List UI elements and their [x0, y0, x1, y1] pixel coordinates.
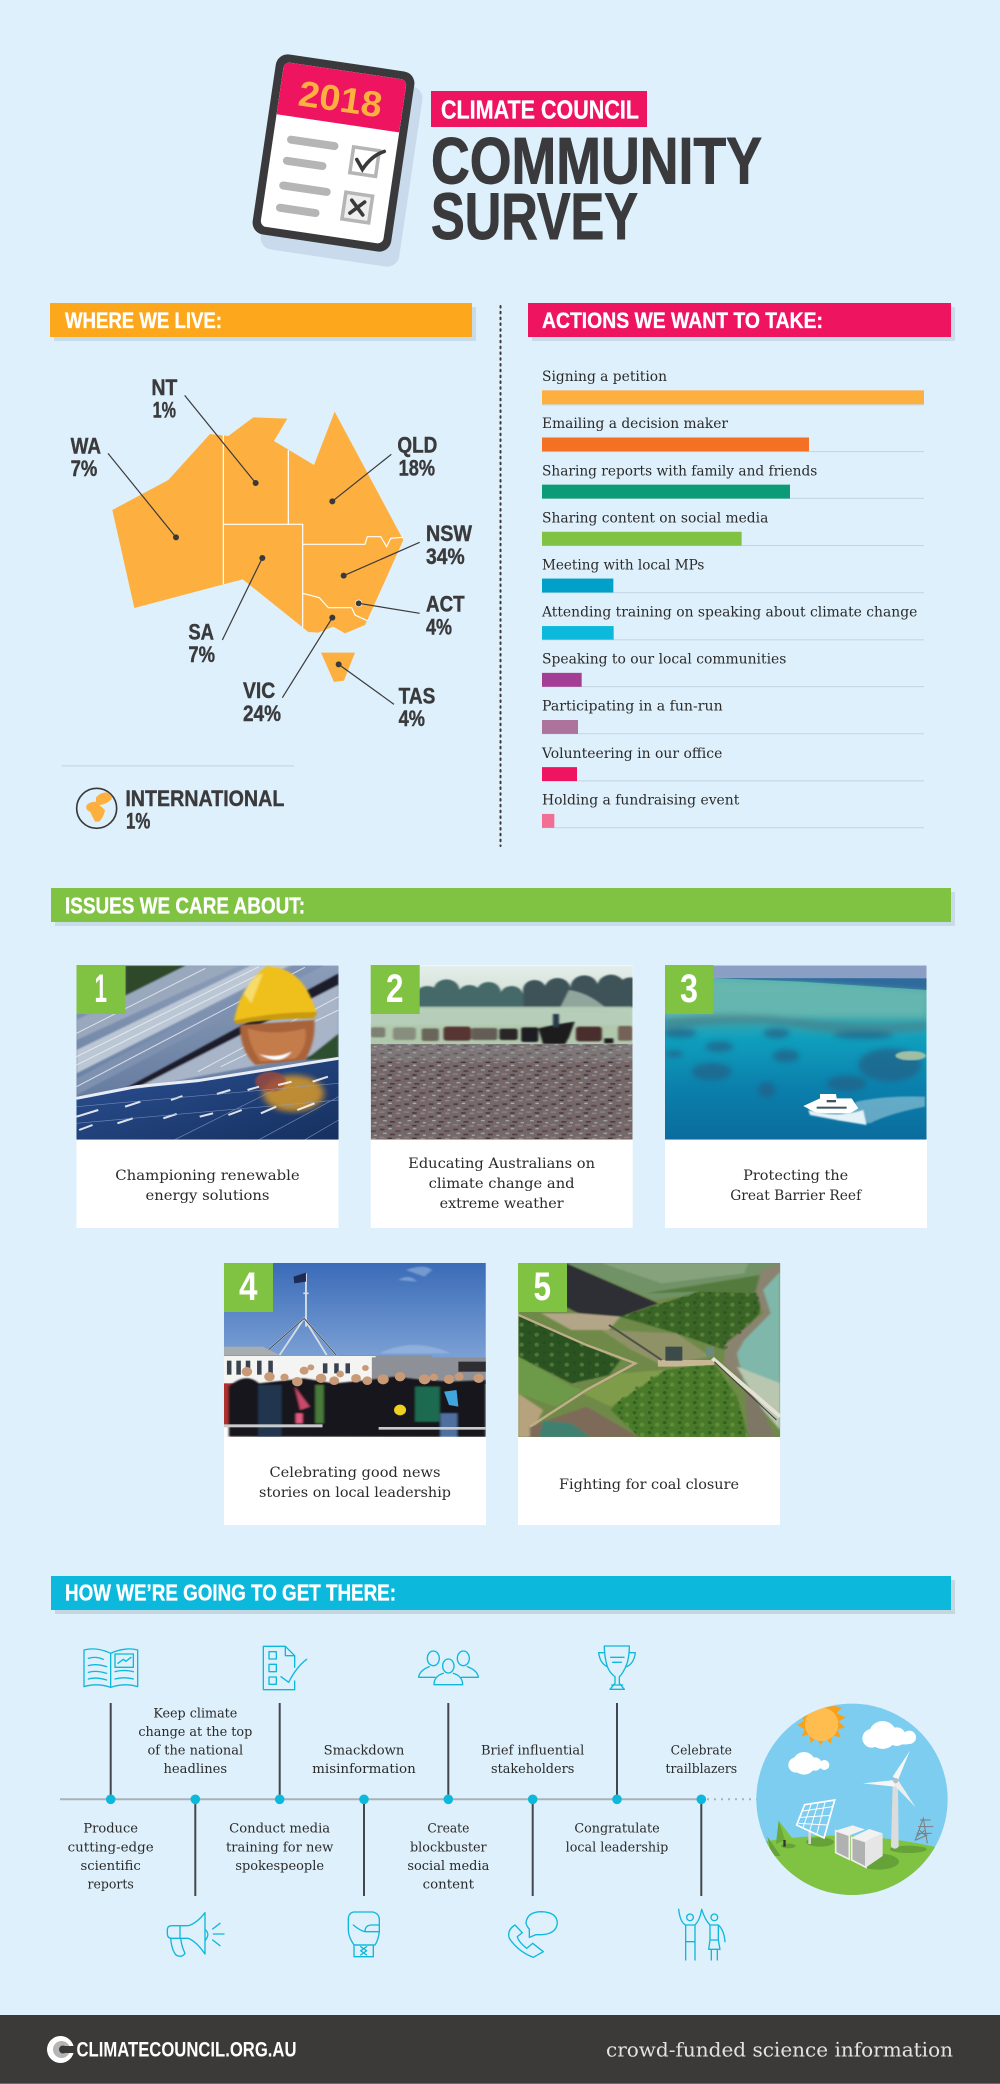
title — [431, 91, 762, 253]
international legend: 1% — [126, 809, 150, 834]
caption 2: climate change and — [429, 1176, 575, 1192]
bar chart: actions: Speaking to our local communities — [542, 652, 787, 668]
bar chart: actions: Emailing a decision maker — [542, 417, 729, 432]
caption 2: Educating Australians on — [408, 1156, 595, 1172]
map leader lines and labels: 24% — [243, 701, 281, 726]
map leader lines and labels: ACT — [426, 592, 465, 617]
panel: issue 5 — [518, 1263, 780, 1525]
caption 4: stories on local leadership — [259, 1485, 451, 1501]
icon: phone and speech bubble — [509, 1912, 557, 1957]
icon: trophy — [599, 1646, 635, 1689]
heading: actions we want to take: ACTIONS WE WANT TO TAKE: — [542, 308, 823, 333]
panel: issue 4 — [224, 1263, 486, 1525]
photo: solar panels worker — [76, 965, 339, 1140]
number badge 4 — [224, 1263, 273, 1312]
number badge 5: 5 — [534, 1265, 551, 1309]
international legend — [76, 788, 284, 830]
map leader lines and labels: QLD — [397, 433, 437, 458]
photo: drought cattle — [371, 965, 642, 1140]
pylon — [915, 1818, 933, 1843]
icon: checklist — [263, 1646, 307, 1690]
caption 3 — [730, 1168, 863, 1204]
icon: survey tablet 2018: 2018 — [296, 73, 385, 125]
panel: issue 2 — [371, 965, 642, 1228]
timeline steps text: Conduct media — [229, 1822, 330, 1837]
ground — [766, 1836, 935, 1895]
illustration: renewable energy scene — [753, 1704, 948, 1897]
caption 1: energy solutions — [146, 1188, 270, 1204]
bar chart: actions: Signing a petition — [542, 370, 668, 385]
photo: parliament house group — [224, 1263, 486, 1437]
number badge 1: 1 — [94, 967, 107, 1011]
number badge 5 — [518, 1263, 567, 1312]
timeline steps text: stakeholders — [491, 1762, 574, 1777]
timeline steps text: social media — [407, 1859, 489, 1874]
heading: how we're going to get there: HOW WE’RE GOING TO GET THERE: — [65, 1580, 396, 1606]
timeline steps text: blockbuster — [410, 1840, 487, 1855]
sun — [797, 1706, 846, 1745]
map leader lines and labels: NT — [151, 375, 178, 400]
title: CLIMATE COUNCIL — [441, 94, 639, 124]
bar chart: actions: Attending training on speaking about climate change — [541, 605, 918, 621]
icon: survey tablet 2018 — [251, 53, 424, 268]
bar chart: actions: Holding a fundraising event — [542, 793, 740, 809]
map leader lines and labels — [71, 375, 472, 731]
timeline steps text: local leadership — [566, 1840, 668, 1855]
timeline steps text: Celebrate — [671, 1743, 732, 1758]
caption 4: Celebrating good news — [270, 1465, 440, 1481]
heading: actions we want to take — [528, 303, 955, 341]
bar chart: actions: Sharing reports with family and friends — [542, 464, 818, 479]
timeline steps text: Smackdown — [324, 1743, 405, 1758]
icon: boxing glove — [348, 1912, 379, 1957]
map leader lines and labels: VIC — [243, 678, 275, 703]
map leader lines and labels: 4% — [399, 706, 425, 731]
timeline steps text: change at the top — [138, 1725, 252, 1740]
heading: how we're going to get there — [51, 1576, 955, 1614]
timeline steps text: reports — [87, 1877, 134, 1892]
map of Australia — [62, 375, 472, 834]
footer bar — [0, 2015, 1000, 2084]
number badge 2 — [371, 965, 420, 1014]
map leader lines and labels: WA — [71, 433, 101, 458]
timeline steps text: of the national — [147, 1743, 243, 1758]
title: COMMUNITY — [431, 123, 762, 197]
timeline steps text — [68, 1706, 737, 1892]
footer logo: CLIMATECOUNCIL.ORG.AU — [76, 2038, 296, 2062]
caption 4 — [259, 1465, 451, 1501]
heading: where we live: WHERE WE LIVE: — [65, 308, 222, 333]
map leader lines and labels: 4% — [426, 614, 452, 639]
timeline steps text: cutting-edge — [68, 1840, 154, 1855]
icon: group of people — [419, 1651, 478, 1685]
divider dotted — [500, 306, 502, 846]
map leader lines and labels: NSW — [426, 521, 472, 546]
caption 5: Fighting for coal closure — [559, 1477, 739, 1493]
caption 2 — [408, 1156, 595, 1212]
caption 1: Championing renewable — [115, 1168, 300, 1184]
number badge 1 — [76, 965, 126, 1014]
caption 2: extreme weather — [440, 1196, 564, 1212]
timeline steps text: scientific — [80, 1859, 141, 1874]
map leader lines and labels: 7% — [188, 642, 215, 667]
bar chart: actions: Volunteering in our office — [541, 746, 723, 762]
number badge 3 — [665, 965, 714, 1014]
photo: great barrier reef — [663, 965, 927, 1140]
photo: coal port aerial — [518, 1263, 780, 1437]
tree — [767, 1821, 792, 1856]
icon: report book — [84, 1649, 138, 1687]
international legend: INTERNATIONAL — [125, 786, 284, 811]
bar chart: actions: Meeting with local MPs — [542, 558, 705, 573]
timeline steps text: Congratulate — [574, 1822, 660, 1837]
timeline steps text: Brief influential — [481, 1743, 584, 1758]
bar chart: actions: Sharing content on social media — [542, 511, 769, 527]
wind turbine — [863, 1751, 916, 1849]
heading: issues we care about — [51, 888, 955, 926]
clouds — [788, 1721, 916, 1775]
map leader lines and labels: SA — [188, 619, 214, 644]
title: SURVEY — [431, 179, 638, 253]
batteries — [836, 1825, 883, 1867]
bar chart: actions: Participating in a fun-run — [542, 699, 723, 715]
timeline steps text: spokespeople — [235, 1859, 324, 1874]
number badge 4: 4 — [239, 1265, 258, 1309]
footer tagline: crowd-funded science information — [606, 2038, 953, 2062]
bar chart: actions — [541, 370, 924, 828]
heading: where we live — [50, 303, 476, 341]
map leader lines and labels: 1% — [153, 398, 176, 423]
solar panel — [797, 1800, 835, 1844]
timeline steps text: trailblazers — [665, 1762, 737, 1777]
map leader lines and labels: TAS — [399, 683, 435, 708]
timeline steps text: Produce — [83, 1822, 138, 1837]
timeline — [60, 1703, 757, 1896]
number badge 2: 2 — [386, 967, 404, 1011]
caption 1 — [115, 1168, 300, 1204]
panel: issue 1 — [76, 965, 339, 1228]
caption 3: Protecting the — [743, 1168, 848, 1184]
icon: megaphone — [167, 1913, 224, 1956]
timeline steps text: Keep climate — [153, 1706, 237, 1721]
footer logo — [47, 2036, 296, 2063]
number badge 3: 3 — [680, 967, 698, 1011]
panel: issue 3 — [663, 965, 927, 1228]
caption 3: Great Barrier Reef — [730, 1188, 863, 1204]
map leader lines and labels: 34% — [426, 544, 465, 569]
timeline steps text: content — [423, 1877, 475, 1892]
map leader lines and labels: 18% — [399, 455, 435, 480]
timeline steps text: Create — [427, 1822, 469, 1837]
timeline steps text: headlines — [163, 1762, 227, 1777]
icon: high five people — [679, 1909, 725, 1960]
heading: issues we care about: ISSUES WE CARE ABOUT: — [65, 892, 305, 918]
timeline steps text: training for new — [226, 1840, 334, 1855]
map leader lines and labels: 7% — [71, 456, 97, 481]
timeline steps text: misinformation — [312, 1762, 416, 1777]
